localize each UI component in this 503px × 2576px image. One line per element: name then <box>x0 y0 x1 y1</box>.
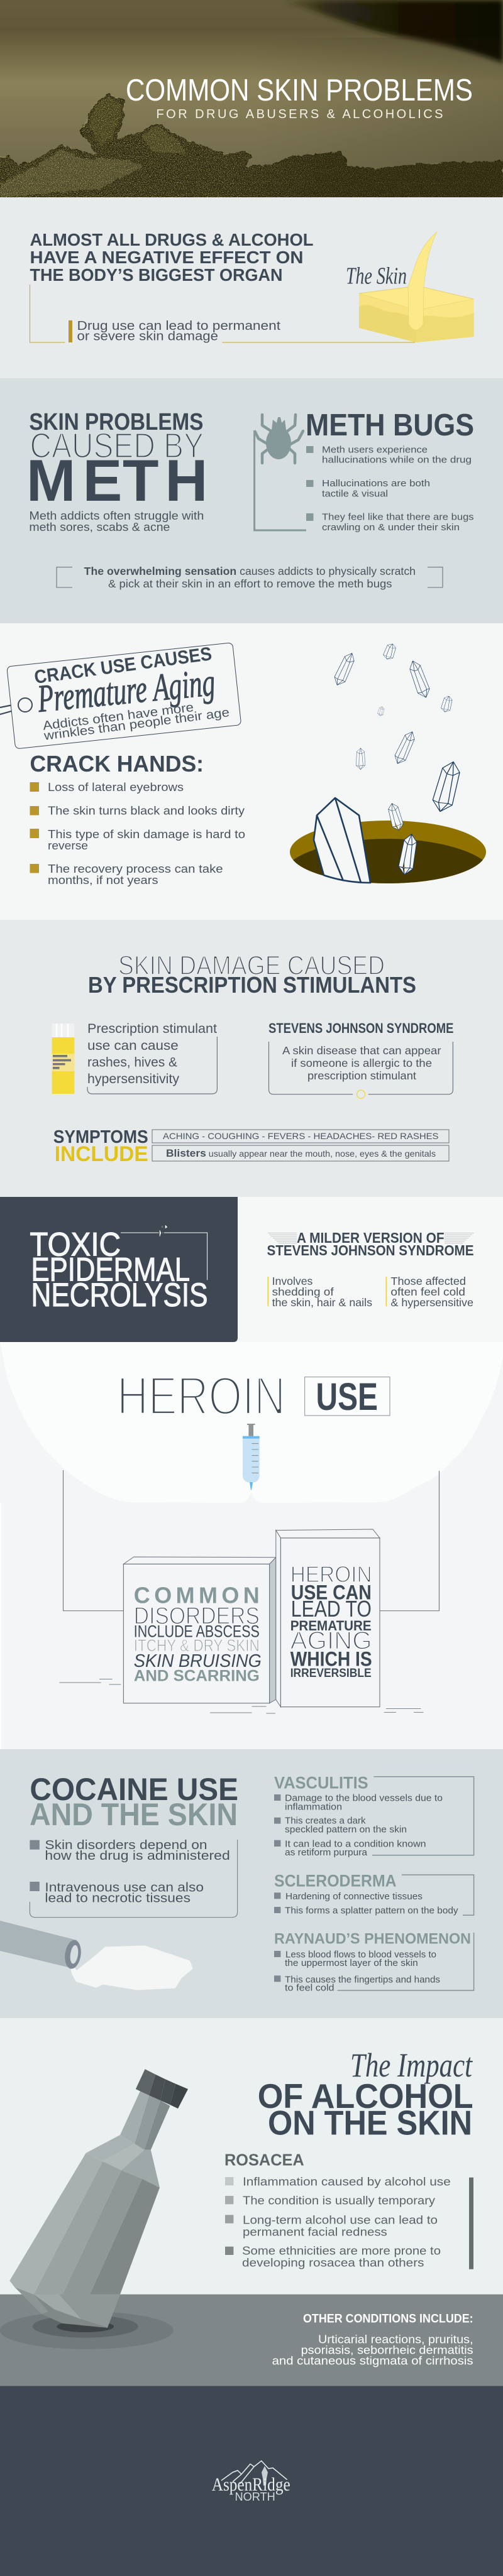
heading: symptoms include: INCLUDE <box>55 1142 148 1166</box>
text: involves shedding: shedding of <box>272 1285 334 1298</box>
panel: hero header <box>0 0 503 201</box>
icon: syringe <box>243 1424 260 1490</box>
panel: milder version <box>0 1197 503 1342</box>
list: cocaine administration: how the drug is administered <box>45 1848 230 1863</box>
heading: impact of alcohol <box>258 2046 473 2142</box>
panel: other conditions <box>0 2295 503 2386</box>
heading: cocaine use: AND THE SKIN <box>30 1797 238 1832</box>
panel: toxic epidermal necrolysis: NECROLYSIS <box>31 1277 207 1314</box>
tag: premature aging: Addicts often have more <box>42 701 194 733</box>
text: meth addicts: Meth addicts often struggle with <box>29 509 204 522</box>
heading: milder version <box>267 1230 474 1258</box>
list: rosacea <box>225 2175 473 2269</box>
text: stimulant rashes: rashes, hives & <box>87 1056 177 1070</box>
box: common disorders <box>123 1557 276 1703</box>
list: rosacea: Long-term alcohol use can lead to <box>243 2213 438 2226</box>
box: common disorders: INCLUDE ABSCESS <box>134 1622 260 1641</box>
heading: biggest organ: THE BODY’S BIGGEST ORGAN <box>30 265 283 285</box>
box: premature aging: PREMATURE <box>290 1618 372 1634</box>
text: stevens johnson syndrome: STEVENS JOHNSON SYNDROME <box>268 1020 453 1036</box>
icon: large crystal <box>314 798 370 883</box>
callout: overwhelming sensation: The overwhelming sensation causes addicts to physically scratch <box>84 565 416 577</box>
panel: biggest organ intro <box>0 197 503 378</box>
text: scleroderma: Hardening of connective tissues <box>285 1892 423 1902</box>
icon: bottle <box>9 2069 188 2328</box>
box: symptoms <box>152 1130 449 1143</box>
list: crack hands: months, if not years <box>48 873 158 887</box>
text: scleroderma: This forms a splatter pattern on the body <box>285 1906 458 1916</box>
panel: prescription stimulants <box>0 920 503 1197</box>
list: rosacea: Inflammation caused by alcohol use <box>243 2175 451 2188</box>
text: vasculitis: Damage to the blood vessels due to <box>285 1794 443 1804</box>
text: involves shedding: the skin, hair & nails <box>272 1296 372 1309</box>
box: common disorders: ITCHY & DRY SKIN <box>134 1636 260 1655</box>
list: rosacea: permanent facial redness <box>243 2225 387 2238</box>
heading: impact of alcohol: The Impact <box>350 2046 473 2084</box>
heading: impact of alcohol: ON THE SKIN <box>268 2104 472 2142</box>
callout: overwhelming sensation: & pick at their skin in an effort to remove the meth bugs <box>108 577 392 590</box>
tag: premature aging: Premature Aging <box>35 661 217 721</box>
subtitle: FOR DRUG ABUSERS & ALCOHOLICS <box>156 107 443 121</box>
text: involves shedding: Involves <box>272 1275 313 1287</box>
text: vasculitis: inflammation <box>285 1802 342 1812</box>
text: other conditions: Urticarial reactions, pruritus, <box>318 2333 473 2345</box>
heading: skin problems caused by meth <box>26 409 207 513</box>
logo: aspen ridge north <box>212 2461 290 2503</box>
text: those affected <box>386 1275 473 1309</box>
list: meth bugs <box>306 445 474 533</box>
list: meth bugs: crawling on & under their skin <box>322 522 460 533</box>
icon: skin cube with hair <box>359 232 474 342</box>
heading: milder version: A MILDER VERSION OF <box>297 1230 445 1246</box>
tag: premature aging: CRACK USE CAUSES <box>33 643 213 688</box>
icon: hole <box>290 821 486 883</box>
box: common disorders: COMMON <box>134 1582 260 1608</box>
heading: meth bugs: METH BUGS <box>306 408 474 442</box>
panel: heroin <box>0 1342 503 1749</box>
list: crack hands: reverse <box>48 839 88 852</box>
text: vasculitis: VASCULITIS <box>274 1774 368 1793</box>
callout: overwhelming sensation <box>57 565 443 590</box>
panel: alcohol <box>0 2018 503 2295</box>
heading: impact of alcohol: OF ALCOHOL <box>258 2077 473 2115</box>
list: meth bugs: hallucinations while on the drug <box>322 455 472 466</box>
box: premature aging: WHICH IS <box>290 1647 372 1670</box>
heading: crack hands: CRACK HANDS: <box>30 751 204 777</box>
heading: symptoms include <box>53 1127 148 1166</box>
text: raynaud's phenomenon: This causes the fingertips and hands <box>285 1975 440 1985</box>
list: crack hands: Loss of lateral eyebrows <box>48 780 184 794</box>
tag: premature aging: wrinkles than people their age <box>43 706 230 743</box>
text: raynaud's phenomenon: Less blood flows to blood vessels to <box>285 1950 436 1960</box>
heading: cocaine use: COCAINE USE <box>30 1772 238 1807</box>
text: vasculitis: as retiform purpura <box>285 1848 368 1858</box>
box: premature aging: LEAD TO <box>291 1596 372 1622</box>
text: vasculitis: This creates a dark <box>285 1816 366 1826</box>
list: meth bugs: They feel like that there are bugs <box>322 512 474 523</box>
list: meth bugs: Hallucinations are both <box>322 478 430 489</box>
text: involves shedding <box>268 1275 372 1309</box>
text: other conditions <box>272 2333 473 2367</box>
heading: heroin use: HEROIN <box>117 1367 285 1426</box>
text: other conditions: psoriasis, seborrheic dermatitis <box>301 2344 473 2357</box>
list: cocaine administration: Skin disorders depend on <box>45 1838 207 1852</box>
heading: rosacea: ROSACEA <box>224 2151 304 2169</box>
box: common disorders: DISORDERS <box>134 1603 260 1629</box>
text: stevens johnson syndrome: A skin disease that can appear <box>282 1044 441 1057</box>
label: the skin: The Skin <box>346 263 407 290</box>
panel: toxic epidermal necrolysis <box>0 1197 238 1342</box>
text: raynaud's phenomenon: the uppermost layer of the skin <box>285 1958 418 1968</box>
heading: heroin use: USE <box>316 1375 378 1418</box>
text: scleroderma <box>274 1872 474 1916</box>
list: meth bugs: Meth users experience <box>322 445 428 456</box>
list: meth bugs: tactile & visual <box>322 489 388 499</box>
list: crack hands: The recovery process can take <box>48 862 223 875</box>
box: premature aging: HEROIN <box>290 1561 372 1587</box>
text: stimulant rashes <box>87 1022 217 1094</box>
panel: toxic epidermal necrolysis: EPIDERMAL <box>31 1252 190 1289</box>
panel: toxic epidermal necrolysis: TOXIC <box>30 1226 121 1263</box>
heading: skin damage <box>88 951 416 998</box>
text: other conditions: and cutaneous stigmata of cirrhosis <box>272 2354 473 2367</box>
callout: permanent damage: or severe skin damage <box>77 329 218 343</box>
heading: skin damage: SKIN DAMAGE CAUSED <box>118 951 385 981</box>
text: raynaud's phenomenon <box>274 1930 474 1993</box>
box: blisters: Blisters usually appear near the mouth, nose, eyes & the genitals <box>166 1147 436 1159</box>
panel: crack <box>0 623 503 920</box>
text: vasculitis: It can lead to a condition known <box>285 1839 426 1849</box>
heading: biggest organ: HAVE A NEGATIVE EFFECT ON <box>30 248 303 267</box>
text: meth addicts <box>29 509 204 533</box>
heading: milder version: STEVENS JOHNSON SYNDROME <box>267 1242 474 1258</box>
text: vasculitis <box>274 1774 474 1858</box>
icon: tube <box>0 1921 83 1970</box>
text: stimulant rashes: use can cause <box>87 1039 179 1053</box>
logo: aspen ridge north: AspenRidge <box>212 2474 290 2495</box>
text: meth addicts: meth sores, scabs & acne <box>29 520 170 533</box>
text: scleroderma: SCLERODERMA <box>274 1872 397 1891</box>
box: premature aging: AGING <box>290 1627 372 1655</box>
list: cocaine administration: Intravenous use can also <box>45 1880 204 1895</box>
callout: permanent damage <box>69 319 280 343</box>
box: premature aging <box>276 1529 380 1707</box>
box: symptoms: ACHING - COUGHING - FEVERS - HEADACHES- RED RASHES <box>163 1131 439 1141</box>
heading: skin damage: BY PRESCRIPTION STIMULANTS <box>88 972 416 998</box>
text: raynaud's phenomenon: to feel cold <box>285 1983 334 1993</box>
panel: footer <box>0 2386 503 2576</box>
text: stevens johnson syndrome <box>268 1020 453 1098</box>
box: common disorders: AND SCARRING <box>134 1667 260 1685</box>
list: cocaine administration <box>30 1838 238 1918</box>
heading: symptoms include: SYMPTOMS <box>53 1127 148 1147</box>
list: cocaine administration: lead to necrotic tissues <box>45 1891 191 1906</box>
heading: skin problems caused by meth: METH <box>26 447 207 513</box>
text: stimulant rashes: hypersensitivity <box>87 1072 180 1086</box>
heading: skin problems caused by meth: SKIN PROBLEMS <box>29 409 203 435</box>
text: stevens johnson syndrome: if someone is allergic to the <box>291 1057 432 1069</box>
text: stevens johnson syndrome: prescription stimulant <box>307 1069 416 1082</box>
callout: permanent damage: Drug use can lead to permanent <box>77 319 280 333</box>
icon: falling crystals <box>332 642 463 876</box>
box: blisters <box>152 1145 449 1161</box>
box: premature aging: USE CAN <box>291 1581 372 1603</box>
icon: bug <box>255 415 303 463</box>
rocks photo <box>0 88 503 201</box>
bottle shadow <box>0 2311 174 2349</box>
icon: stimulant bottle <box>52 1023 74 1094</box>
list: crack hands: This type of skin damage is hard to <box>48 827 245 841</box>
heading: biggest organ <box>30 230 313 285</box>
list: rosacea: The condition is usually temporary <box>243 2194 436 2207</box>
box: premature aging: IRREVERSIBLE <box>290 1667 372 1680</box>
list: rosacea: developing rosacea than others <box>242 2256 424 2269</box>
text: those affected: Those affected <box>390 1275 466 1287</box>
tag: premature aging <box>0 643 241 749</box>
text: vasculitis: speckled pattern on the skin <box>285 1825 407 1835</box>
list: crack hands <box>30 780 245 887</box>
text: those affected: & hypersensitive <box>390 1296 473 1309</box>
box: common disorders: SKIN BRUISING <box>134 1651 262 1671</box>
text: raynaud's phenomenon: RAYNAUD’S PHENOMENON <box>274 1930 471 1947</box>
text: stimulant rashes: Prescription stimulant <box>87 1022 217 1036</box>
panel: meth <box>0 378 503 623</box>
text: those affected: often feel cold <box>390 1285 465 1298</box>
heading: biggest organ: ALMOST ALL DRUGS & ALCOHOL <box>30 230 313 249</box>
list: crack hands: The skin turns black and looks dirty <box>48 804 245 817</box>
logo: aspen ridge north: NORTH <box>235 2491 275 2503</box>
stripes left <box>268 1233 474 1243</box>
list: rosacea: Some ethnicities are more prone to <box>242 2244 441 2257</box>
heading: skin problems caused by meth: CAUSED BY <box>30 426 204 466</box>
heading: other conditions: OTHER CONDITIONS INCLUDE: <box>303 2313 473 2326</box>
icon: powder <box>70 1946 192 1989</box>
panel: cocaine <box>0 1749 503 2018</box>
heading: cocaine use <box>30 1772 238 1832</box>
